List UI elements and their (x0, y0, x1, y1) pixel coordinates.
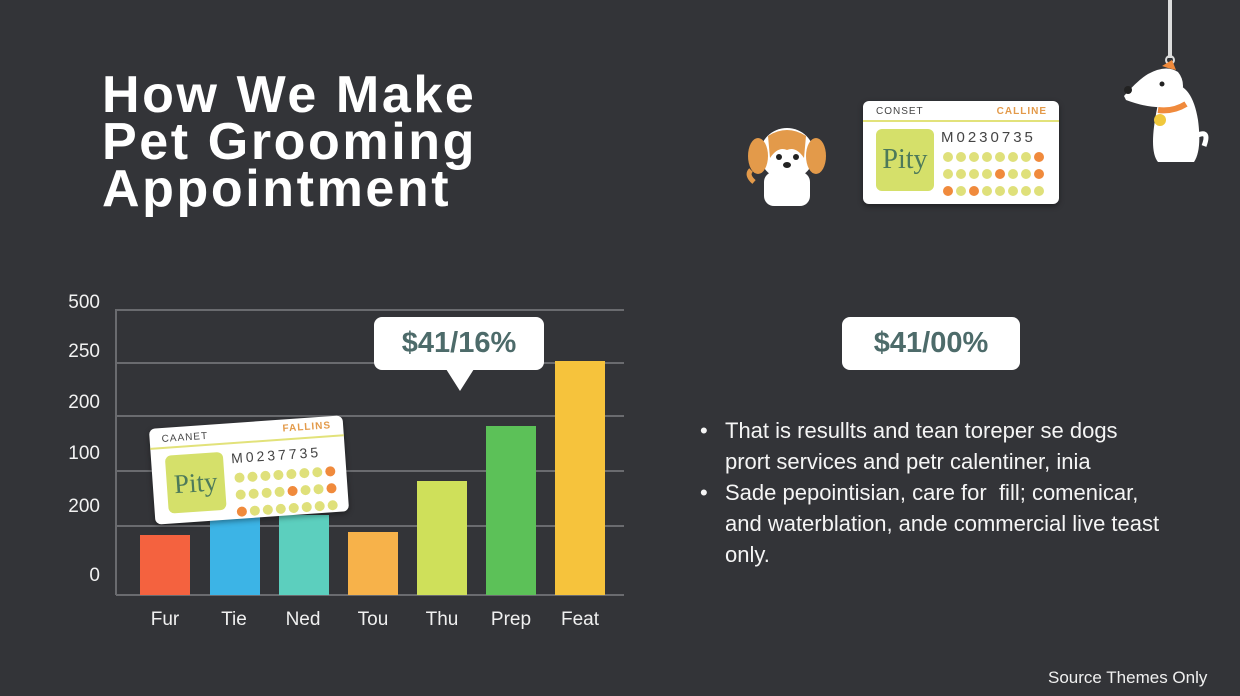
bar chart: 0 (89, 565, 100, 586)
bar chart: 200 (68, 392, 100, 413)
x labels: Fur (151, 609, 179, 630)
text block: bullets: • (700, 480, 708, 505)
icon: puppy (746, 128, 826, 206)
text block: bullets: Sade pepointisian, care for fill; comenicar, (725, 480, 1138, 505)
callout: chart value: $41/16% (402, 327, 516, 359)
text block: bullets: prort services and petr calentiner, inia (725, 449, 1091, 474)
x labels: Ned (286, 609, 320, 630)
x labels: Tou (358, 609, 388, 630)
card: tilted calendar on chart (149, 415, 349, 525)
bar chart: 250 (68, 341, 100, 362)
text block: bullets (700, 418, 1159, 567)
card: top right calendar (863, 101, 1059, 204)
x labels: Thu (426, 609, 458, 630)
card: top right calendar: CALLINE (997, 106, 1047, 117)
bars (140, 361, 605, 595)
card: top right calendar: CONSET (876, 106, 924, 117)
text block: bullets: That is resullts and tean toreper se dogs (725, 418, 1118, 443)
callout: right value: $41/00% (874, 327, 988, 359)
card: top right calendar: Pity (882, 144, 928, 175)
callout: chart value (374, 317, 544, 391)
card: top right calendar: M0230735 (941, 129, 1036, 146)
x labels: Tie (221, 609, 247, 630)
icon: hanging dog (1124, 0, 1208, 162)
source note: Source Themes Only (1048, 668, 1207, 687)
card: tilted calendar on chart: Pity (173, 466, 219, 499)
x labels: Feat (561, 609, 599, 630)
bar chart: 500 (68, 292, 100, 313)
bar chart: 100 (68, 443, 100, 464)
x labels: Prep (491, 609, 531, 630)
text block: bullets: only. (725, 542, 770, 567)
text block: bullets: and waterblation, ande commercial live teast (725, 511, 1159, 536)
bar chart (68, 292, 624, 630)
text block: bullets: • (700, 418, 708, 443)
title: How We Make (102, 66, 476, 124)
title: Pet Grooming (102, 113, 477, 171)
bar chart: 200 (68, 496, 100, 517)
card: tilted calendar on chart: M0237735 (231, 444, 322, 466)
x labels (151, 609, 599, 630)
card: tilted calendar on chart: FALLINS (282, 420, 331, 435)
card: tilted calendar on chart: CAANET (161, 431, 208, 445)
callout: right value (842, 317, 1020, 370)
title: Appointment (102, 160, 451, 218)
title (102, 66, 477, 218)
